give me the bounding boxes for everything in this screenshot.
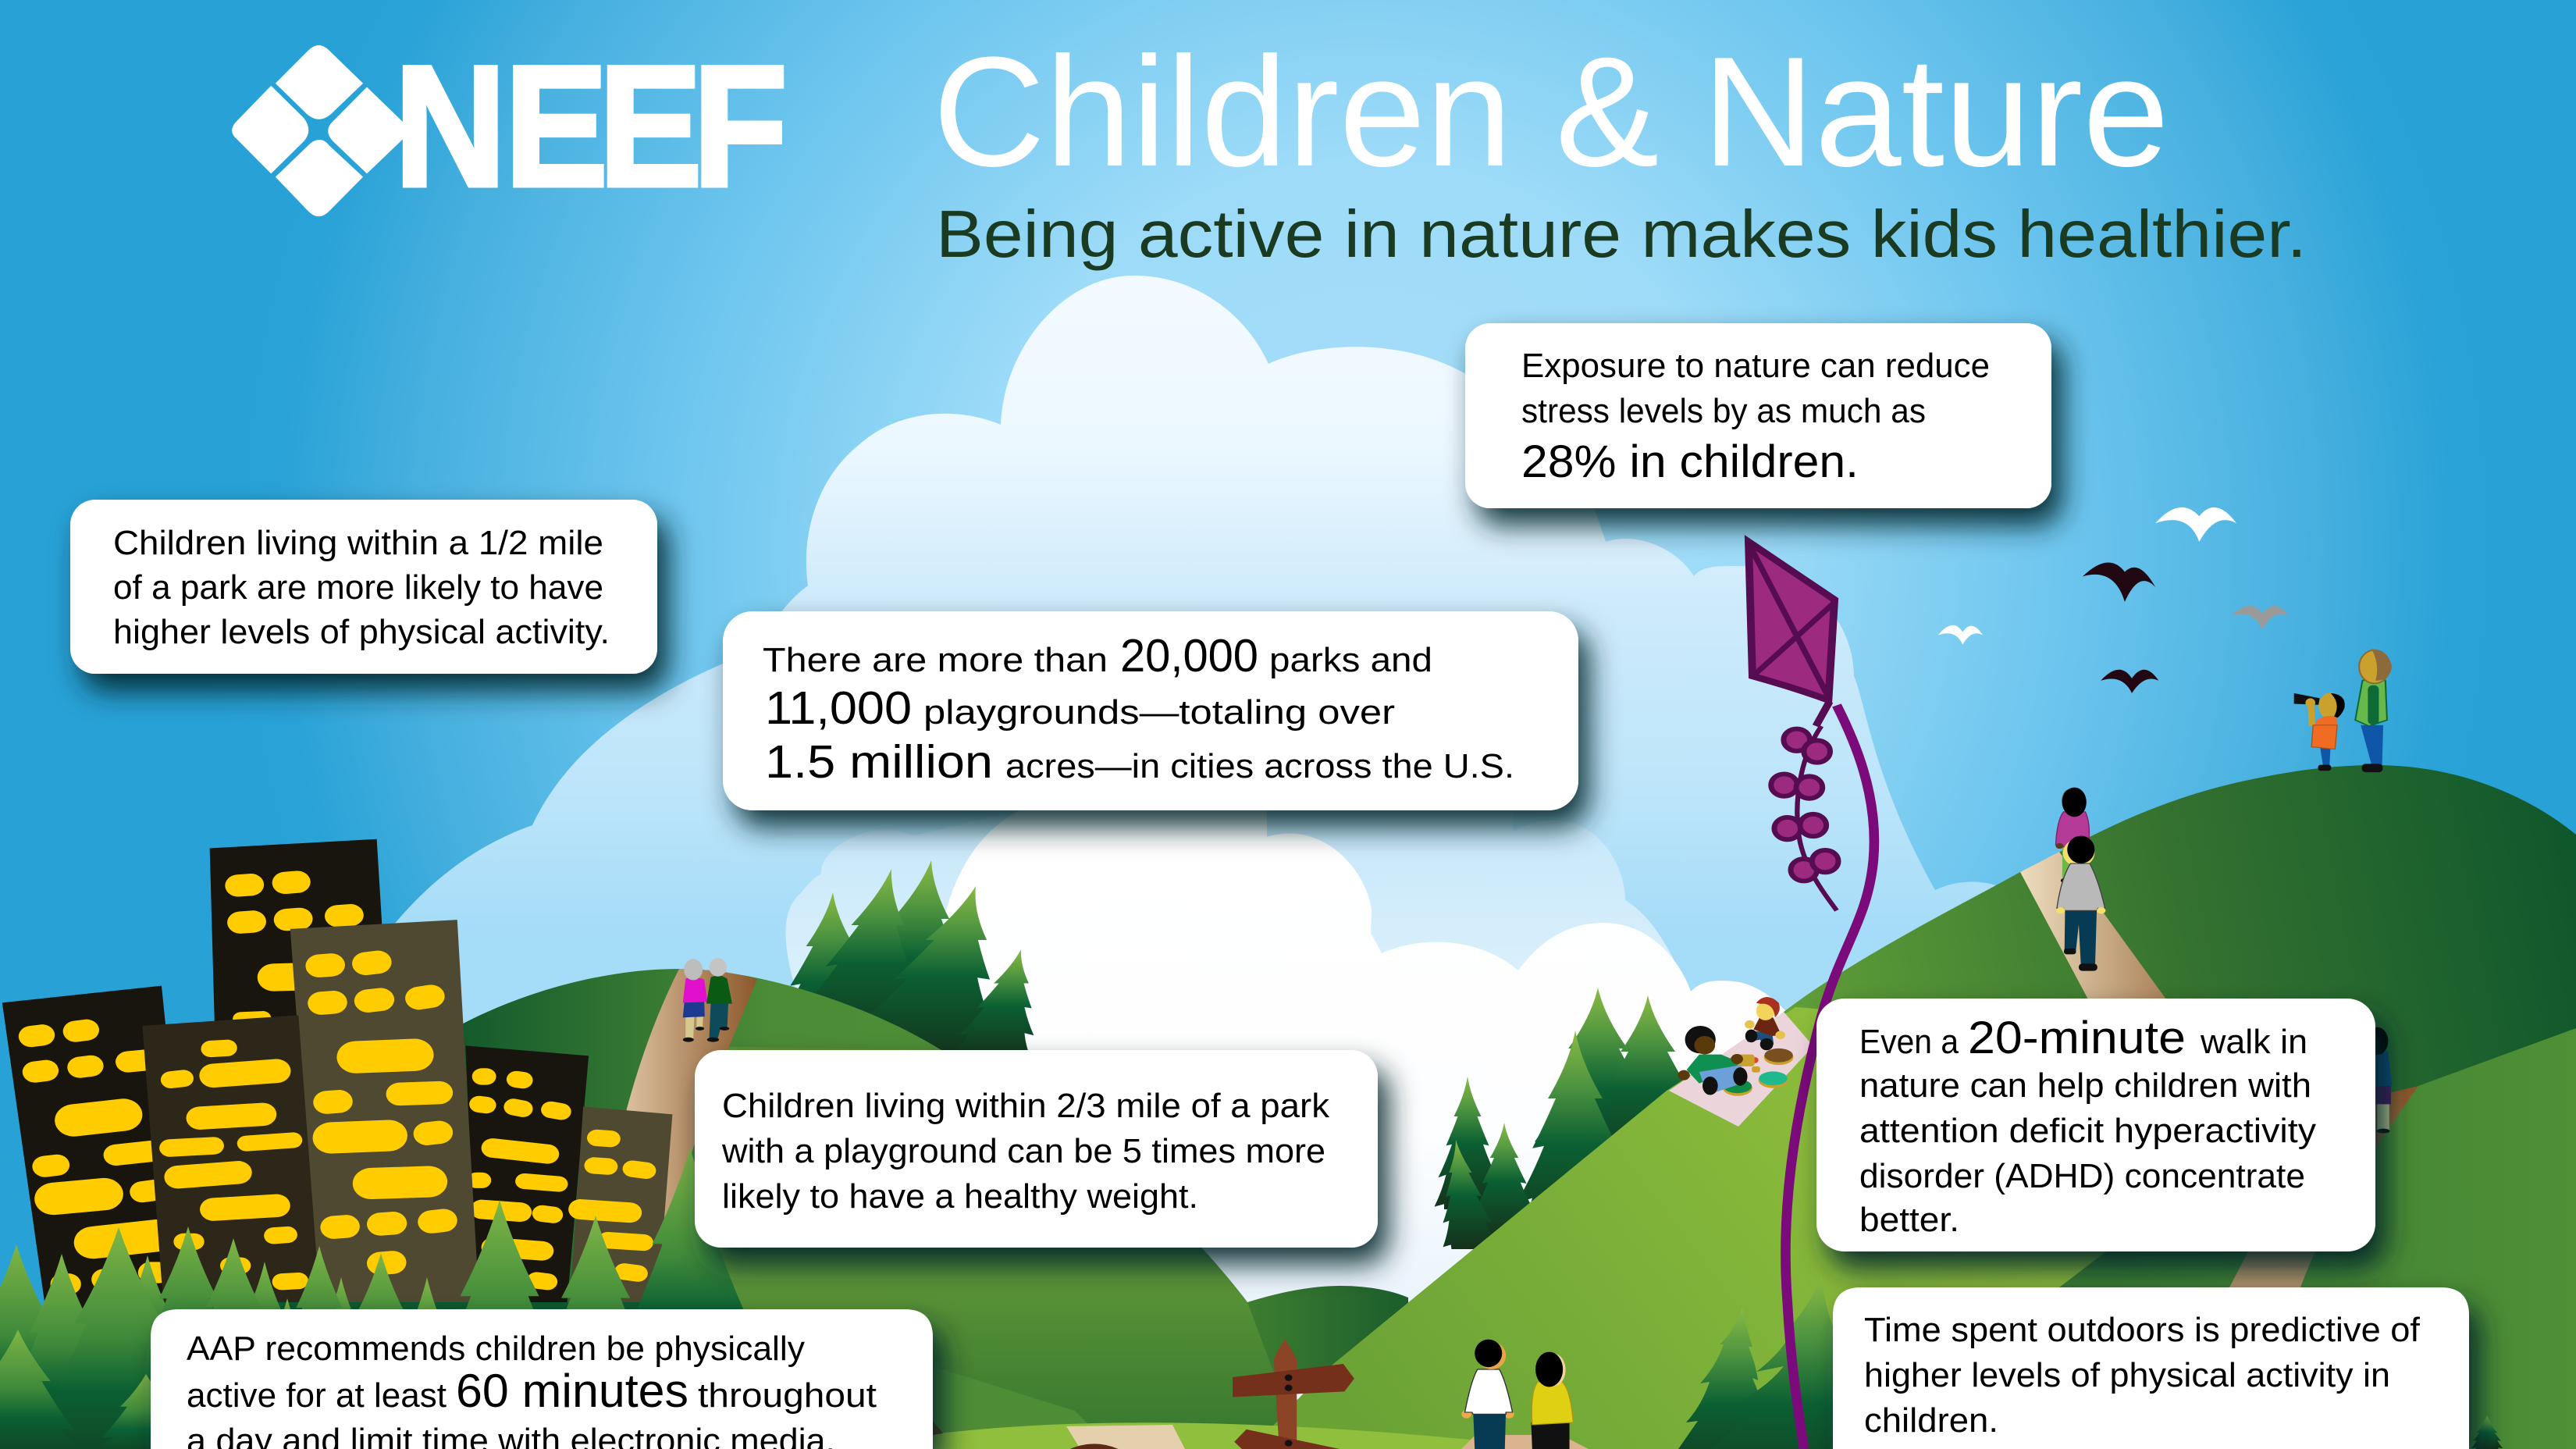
callout: parks and playgrounds: 11,000 <box>765 682 912 734</box>
hill: small middle hill <box>1247 1286 1408 1390</box>
callout: time outdoors: higher levels of physical activity in <box>1864 1356 2390 1394</box>
hill: bottom lime band <box>933 1422 1561 1449</box>
callout: parks and playgrounds: 20,000 <box>1120 630 1258 682</box>
trail under couple <box>1461 1435 1589 1449</box>
callout: parks and playgrounds: 1.5 million <box>765 736 993 788</box>
callout: ADHD walk: 20-minute <box>1968 1013 2186 1063</box>
icon: trail signpost <box>1069 1338 1354 1449</box>
people: adult and child on hilltop <box>2294 650 2392 772</box>
cloud: white front cloud <box>929 809 1788 1405</box>
trees: lower-right forest <box>1678 1275 2503 1449</box>
trees: bottom-left forest <box>0 1148 759 1448</box>
people: walkers on right trail <box>2056 788 2105 971</box>
birds <box>1938 507 2289 693</box>
callout: stress reduction: 28% in children. <box>1521 436 1859 487</box>
callout: AAP recommendation: active for at least <box>187 1376 447 1415</box>
buildings: city skyline <box>2 839 672 1316</box>
trail at bottom center <box>1066 1425 1185 1449</box>
trail on right hill <box>2020 852 2166 999</box>
callout: stress reduction <box>1465 323 2051 508</box>
callout: half-mile park access: of a park are more likely to have <box>113 568 603 607</box>
building: right dark tower <box>465 1045 589 1307</box>
callout: stress reduction: stress levels by as much as <box>1521 392 1926 430</box>
cloud: large back cloud <box>336 276 2108 1093</box>
building: left tower <box>2 986 187 1316</box>
building: back tower <box>210 839 394 1187</box>
adult with child, upper parts <box>2294 650 2392 726</box>
cloud: middle cloud <box>785 809 1678 1093</box>
callout: ADHD walk <box>1816 999 2375 1251</box>
callout: ADHD walk: walk in <box>2200 1023 2307 1061</box>
kite tail and string <box>1771 705 1874 1448</box>
hill: lower left fold <box>933 1366 1093 1435</box>
trees: hilltop cluster <box>765 860 1063 1072</box>
callout: AAP recommendation: AAP recommends children be physically <box>187 1330 805 1368</box>
callout: parks and playgrounds <box>723 611 1578 810</box>
winding trail segment <box>2229 1086 2418 1287</box>
building: small right tower <box>570 1106 672 1309</box>
callout: half-mile park access <box>70 500 657 674</box>
people: elderly couple <box>683 958 732 1042</box>
callout: playground and healthy weight <box>695 1050 1378 1248</box>
callout: time outdoors <box>1833 1287 2469 1449</box>
callout: parks and playgrounds: playgrounds—totaling over <box>923 693 1395 732</box>
trail stub at callout edge <box>933 1421 943 1435</box>
callout: parks and playgrounds: There are more than <box>763 641 1108 679</box>
callout: ADHD walk: better. <box>1859 1201 1959 1239</box>
trees: picnic hill cluster <box>1428 988 1714 1257</box>
callout: ADHD walk: nature can help children with <box>1859 1066 2311 1105</box>
building: center-left tower <box>142 1015 320 1316</box>
picnic scene <box>1669 997 1813 1127</box>
icon: purple kite <box>1749 542 1874 1448</box>
callout: playground and healthy weight: with a playground can be 5 times more <box>721 1132 1325 1170</box>
hill: lower right hill <box>1873 1028 2576 1449</box>
ground strip under buildings <box>148 1302 671 1318</box>
logo: NEEF <box>232 31 788 223</box>
title: Children & Nature <box>933 25 2169 199</box>
hill: left hill lower shading <box>695 1046 1280 1429</box>
subtitle: Being active in nature makes kids healthier. <box>936 198 2307 272</box>
callout: half-mile park access: higher levels of physical activity. <box>113 613 610 651</box>
callout: time outdoors: children. <box>1864 1401 1998 1440</box>
people: couple on bottom trail <box>1461 1340 1573 1449</box>
callout: stress reduction: Exposure to nature can reduce <box>1521 347 1990 385</box>
hill: right hill with walkers <box>1327 765 2576 1449</box>
hill: lime picnic hill <box>1272 1007 2147 1449</box>
picnic blanket <box>1669 1012 1813 1127</box>
callout: AAP recommendation: throughout <box>698 1376 877 1415</box>
callout: AAP recommendation <box>151 1309 933 1449</box>
callout: AAP recommendation: 60 minutes <box>456 1365 688 1417</box>
hill: left hill <box>437 969 1280 1449</box>
callout: playground and healthy weight: Children living within 2/3 mile of a park <box>722 1087 1330 1125</box>
callout: parks and playgrounds: parks and <box>1269 641 1432 679</box>
person partly behind callout <box>2366 1027 2392 1134</box>
callout: parks and playgrounds: acres—in cities across the U.S. <box>1005 747 1514 785</box>
forest floor shadow <box>0 1351 156 1449</box>
callout: time outdoors: Time spent outdoors is predictive of <box>1864 1311 2421 1349</box>
callout: ADHD walk: disorder (ADHD) concentrate <box>1859 1157 2305 1195</box>
kite body <box>1749 542 1835 726</box>
logo wordmark: NEEF <box>394 31 788 223</box>
logo diamond mark <box>232 45 412 216</box>
callout: half-mile park access: Children living within a 1/2 mile <box>113 524 603 562</box>
building: central tall tower <box>290 920 479 1307</box>
callout: ADHD walk: attention deficit hyperactivity <box>1859 1112 2316 1150</box>
callout: playground and healthy weight: likely to have a healthy weight. <box>722 1177 1198 1216</box>
trail on left hill <box>609 969 757 1249</box>
callout: ADHD walk: Even a <box>1859 1023 1959 1061</box>
adult with child, lower parts <box>2311 725 2383 772</box>
